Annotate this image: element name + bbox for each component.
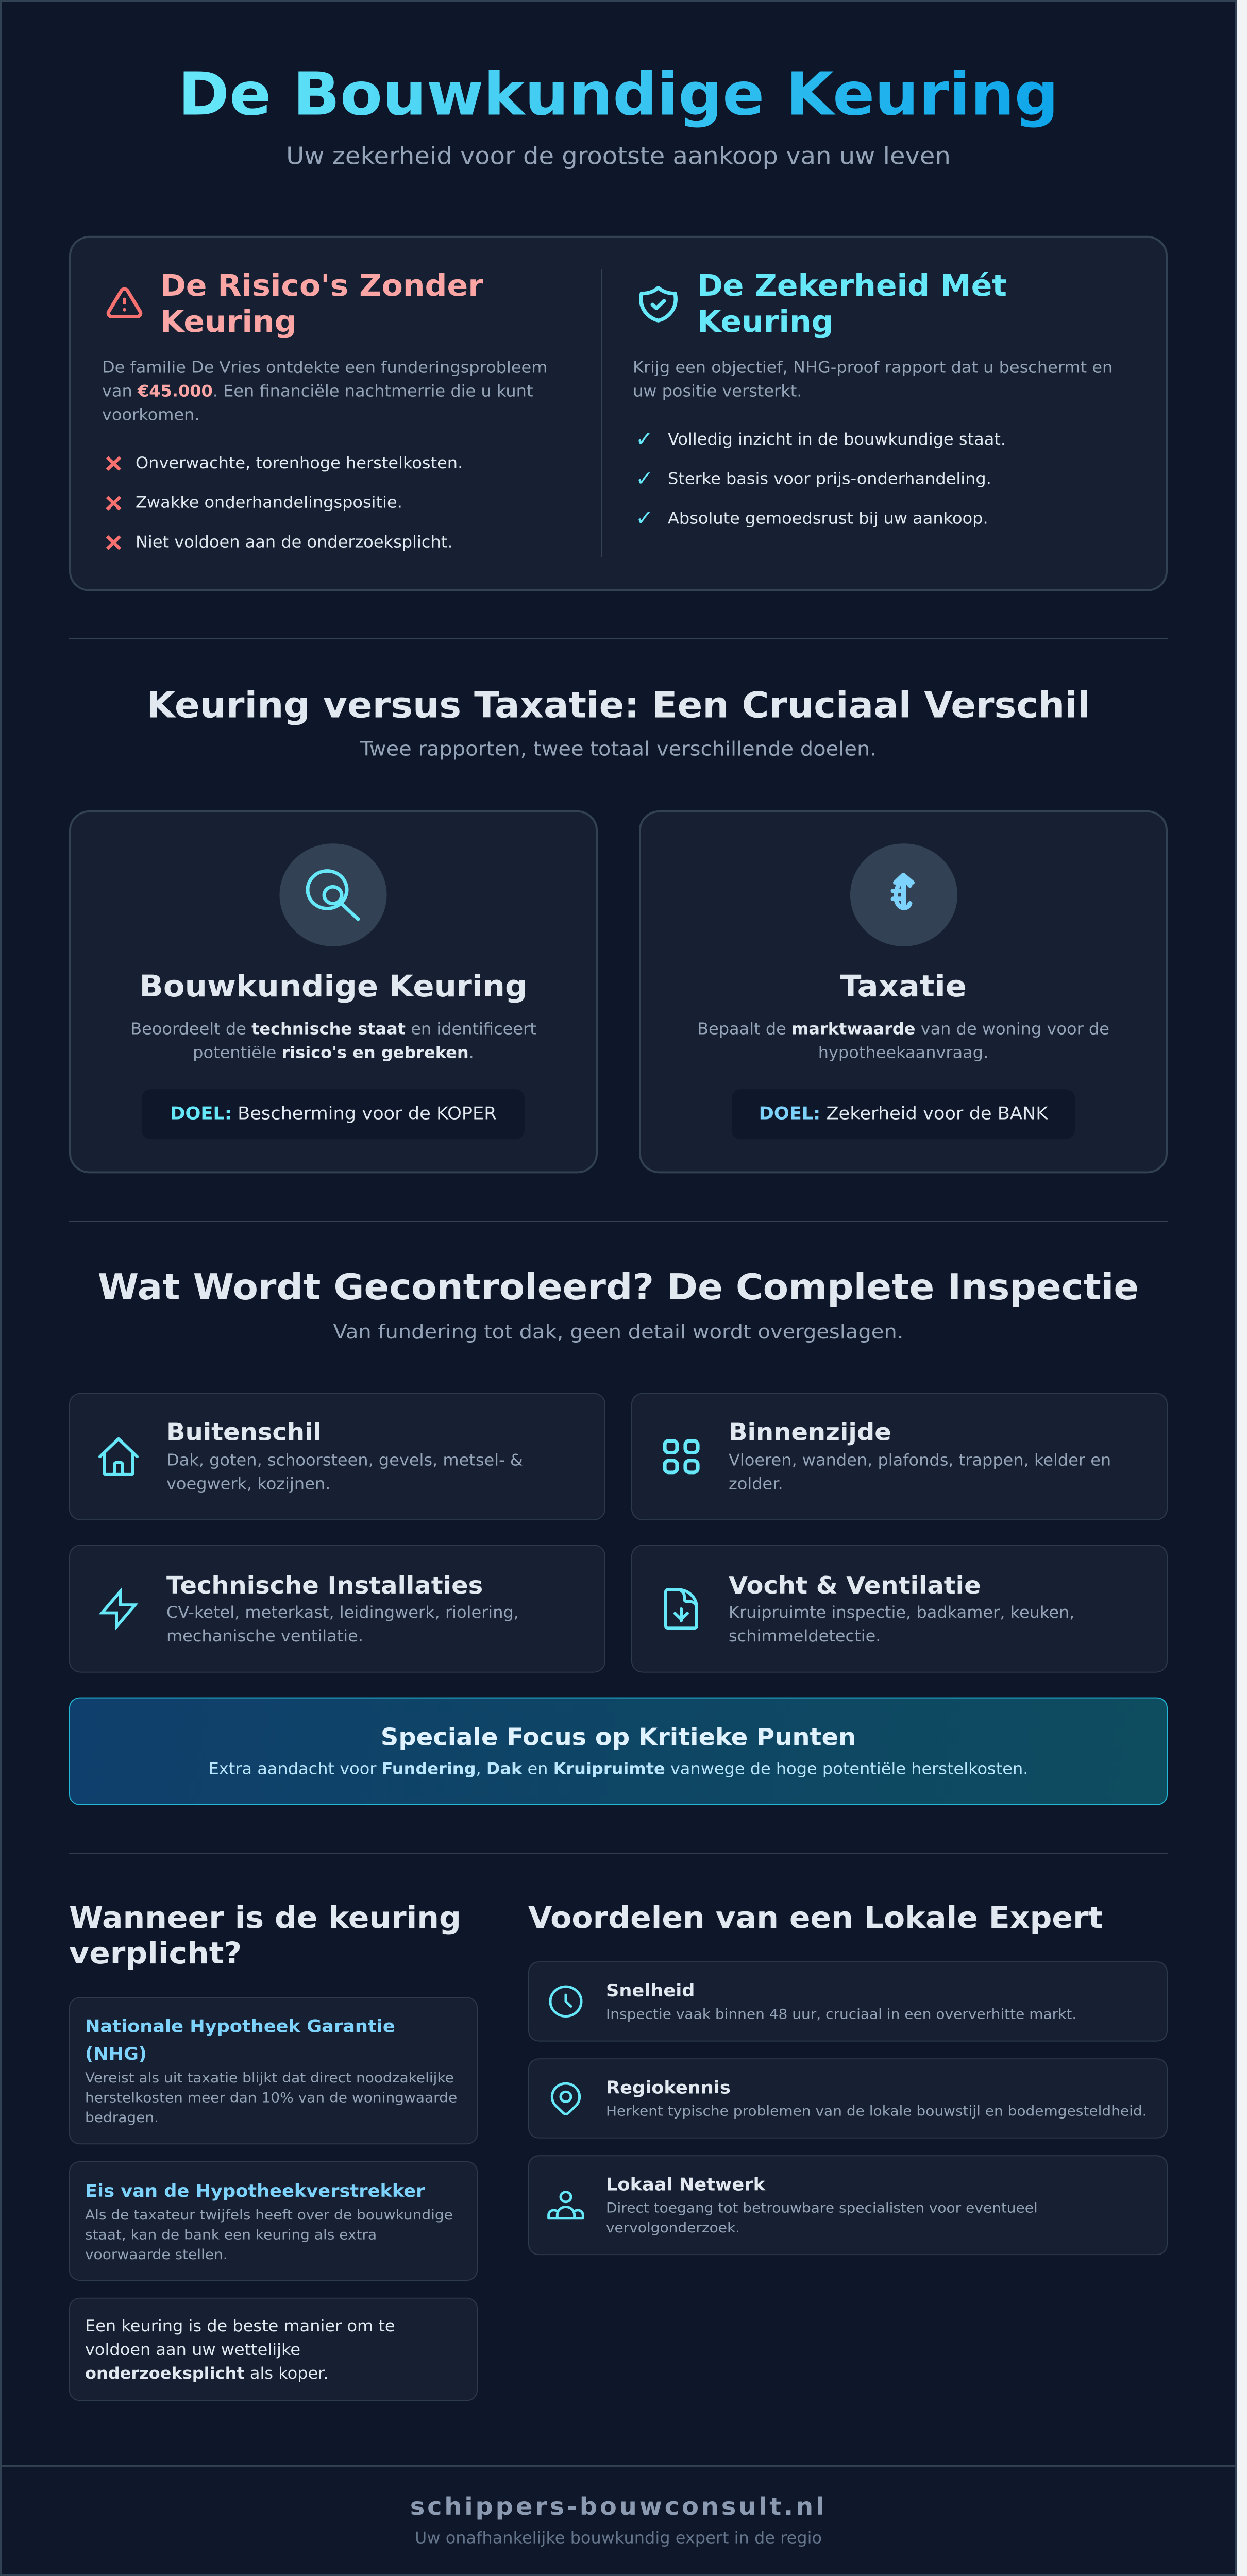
card text: Vloeren, wanden, plafonds, trappen, kelder en bbox=[729, 1451, 1111, 1469]
column: lokale expert bbox=[528, 1900, 1167, 2255]
list: certainty bbox=[635, 427, 1006, 530]
card: NHG: (NHG) bbox=[85, 2044, 147, 2064]
heading: certainty: Keuring bbox=[697, 304, 834, 339]
text: risks intro: van €45.000. Een financiële nachtmerrie die u kunt bbox=[102, 382, 533, 401]
card: onderzoeksplicht: onderzoeksplicht als koper. bbox=[85, 2365, 329, 2383]
card: hypotheekverstrekker bbox=[70, 2162, 477, 2280]
icon: lightning bbox=[102, 1591, 135, 1626]
icon: house bbox=[100, 1439, 137, 1475]
panel: bouwkundige keuring bbox=[70, 811, 597, 1172]
list: risks: Onverwachte, torenhoge herstelkosten. bbox=[136, 454, 463, 472]
card text: Beoordeelt de technische staat en identificeert bbox=[130, 1020, 536, 1039]
heading: risks: Keuring bbox=[160, 304, 297, 339]
card text: Kruipruimte inspectie, badkamer, keuken, bbox=[729, 1604, 1074, 1622]
text: certainty intro: uw positie versterkt. bbox=[633, 382, 802, 401]
card title: Bouwkundige Keuring bbox=[140, 969, 527, 1004]
card: vocht en ventilatie bbox=[632, 1545, 1167, 1672]
icon: warning triangle bbox=[108, 289, 141, 317]
card text bbox=[729, 1572, 1074, 1646]
goal badge bbox=[142, 1089, 525, 1139]
icon: map pin bbox=[552, 2083, 580, 2114]
list: certainty: Absolute gemoedsrust bij uw aankoop. bbox=[668, 510, 988, 528]
card: regiokennis: Herkent typische problemen van de lokale bouwstijl en bodemgesteldheid. bbox=[606, 2104, 1147, 2119]
text: certainty intro: Krijg een objectief, NHG-proof rapport dat u beschermt en bbox=[633, 359, 1113, 377]
card text: Dak, goten, schoorsteen, gevels, metsel- & bbox=[166, 1451, 523, 1469]
icon: grid bbox=[665, 1441, 698, 1472]
card title: Taxatie bbox=[840, 969, 967, 1004]
column: wanneer verplicht bbox=[69, 1900, 477, 2400]
footer bbox=[2, 2465, 1235, 2574]
goal badge bbox=[732, 1089, 1075, 1139]
card: regiokennis bbox=[529, 2059, 1167, 2138]
card text: Buitenschil bbox=[166, 1418, 322, 1446]
icon: shield check bbox=[641, 288, 676, 320]
heading: wanneer verplicht: verplicht? bbox=[69, 1936, 242, 1971]
icon: euro arrow bbox=[850, 843, 957, 946]
card text: Bepaalt de marktwaarde van de woning voor de bbox=[697, 1020, 1109, 1039]
card text: voegwerk, kozijnen. bbox=[166, 1475, 330, 1493]
card text bbox=[166, 1572, 519, 1646]
card: binnenzijde bbox=[632, 1393, 1167, 1520]
list: certainty: Volledig inzicht in de bouwkundige staat. bbox=[668, 430, 1006, 449]
list: risks: Niet voldoen aan de onderzoeksplicht. bbox=[136, 533, 452, 551]
heading: lokale expert: Voordelen van een Lokale Expert bbox=[528, 1900, 1103, 1935]
panel: risks versus certainty bbox=[70, 237, 1167, 590]
callout text: Extra aandacht voor Fundering, Dak en Kruipruimte vanwege de hoge potentiële herstelkosten. bbox=[209, 1760, 1028, 1778]
callout: speciale focus bbox=[70, 1698, 1167, 1805]
card: lokaal netwerk: Lokaal Netwerk bbox=[606, 2175, 766, 2195]
icon: clock bbox=[550, 1987, 581, 2016]
subheading: keuring versus taxatie: Twee rapporten, twee totaal verschillende doelen. bbox=[360, 738, 877, 760]
card text: Vocht & Ventilatie bbox=[729, 1572, 981, 1600]
card text: CV-ketel, meterkast, leidingwerk, riolering, bbox=[166, 1604, 519, 1622]
list: risks bbox=[107, 454, 463, 551]
list: risks: Zwakke onderhandelingspositie. bbox=[136, 494, 402, 512]
card text: schimmeldetectie. bbox=[729, 1628, 881, 1646]
list: certainty: Sterke basis voor prijs-onderhandeling. bbox=[668, 470, 991, 488]
card: snelheid: Snelheid bbox=[606, 1981, 695, 2001]
card: snelheid bbox=[529, 1962, 1167, 2041]
card text bbox=[729, 1418, 1111, 1493]
card text: Technische Installaties bbox=[166, 1572, 483, 1600]
panel: taxatie bbox=[640, 811, 1167, 1172]
icon: people bbox=[549, 2192, 583, 2218]
title: De Bouwkundige Keuring bbox=[178, 60, 1058, 129]
card: hypotheekverstrekker: Als de taxateur twijfels heeft over de bouwkundige bbox=[85, 2208, 453, 2223]
heading: inspectie: Wat Wordt Gecontroleerd? De Complete Inspectie bbox=[98, 1266, 1139, 1308]
text: risks intro: voorkomen. bbox=[102, 406, 200, 425]
footer brand: schippers-bouwconsult.nl bbox=[410, 2493, 827, 2521]
card: lokaal netwerk: Direct toegang tot betrouwbare specialisten voor eventueel bbox=[606, 2200, 1038, 2216]
icon: magnifier bbox=[279, 843, 386, 946]
card: regiokennis: Regiokennis bbox=[606, 2078, 731, 2098]
card: lokaal netwerk bbox=[529, 2156, 1167, 2255]
card text bbox=[166, 1418, 523, 1493]
heading: wanneer verplicht: Wanneer is de keuring bbox=[69, 1900, 461, 1935]
column: certainty bbox=[633, 268, 1113, 530]
text: risks intro: De familie De Vries ontdekte een funderingsprobleem bbox=[102, 359, 547, 377]
card text: potentiële risico's en gebreken. bbox=[193, 1044, 474, 1062]
card: NHG bbox=[70, 1997, 477, 2144]
list: certainty: ✓ bbox=[635, 466, 653, 490]
card: onderzoeksplicht bbox=[70, 2298, 477, 2400]
goal badge: DOEL: Bescherming voor de KOPER bbox=[170, 1104, 497, 1124]
card: NHG: Vereist als uit taxatie blijkt dat direct noodzakelijke bbox=[85, 2071, 454, 2086]
card: NHG: Nationale Hypotheek Garantie bbox=[85, 2016, 395, 2037]
card text: mechanische ventilatie. bbox=[166, 1628, 363, 1646]
footer tagline: Uw onafhankelijke bouwkundig expert in de regio bbox=[415, 2529, 822, 2547]
list: certainty: ✓ bbox=[635, 427, 653, 451]
card: NHG: herstelkosten meer dan 10% van de woningwaarde bbox=[85, 2090, 457, 2106]
heading: certainty: De Zekerheid Mét bbox=[697, 268, 1007, 303]
card: snelheid: Inspectie vaak binnen 48 uur, cruciaal in een oververhitte markt. bbox=[606, 2007, 1076, 2022]
card text: zolder. bbox=[729, 1475, 783, 1493]
callout title: Speciale Focus op Kritieke Punten bbox=[381, 1724, 856, 1751]
list: certainty: ✓ bbox=[635, 506, 653, 530]
column: risks bbox=[102, 268, 547, 551]
card: hypotheekverstrekker: staat, kan de bank een keuring als extra bbox=[85, 2227, 377, 2243]
card text: hypotheekaanvraag. bbox=[818, 1044, 988, 1062]
card: onderzoeksplicht: Een keuring is de beste manier om te bbox=[85, 2317, 395, 2335]
subtitle: Uw zekerheid voor de grootste aankoop van uw leven bbox=[286, 143, 951, 170]
heading: risks: De Risico's Zonder bbox=[160, 268, 483, 303]
card: lokaal netwerk: vervolgonderzoek. bbox=[606, 2221, 740, 2236]
heading: keuring versus taxatie: Keuring versus Taxatie: Een Cruciaal Verschil bbox=[146, 685, 1090, 726]
card: onderzoeksplicht: voldoen aan uw wettelijke bbox=[85, 2341, 300, 2359]
goal badge: DOEL: Zekerheid voor de BANK bbox=[759, 1104, 1049, 1124]
subheading: inspectie: Van fundering tot dak, geen detail wordt overgeslagen. bbox=[333, 1321, 903, 1344]
card: hypotheekverstrekker: Eis van de Hypotheekverstrekker bbox=[85, 2181, 425, 2201]
card: buitenschil bbox=[70, 1393, 605, 1520]
card: technische installaties bbox=[70, 1545, 605, 1672]
card: hypotheekverstrekker: voorwaarde stellen. bbox=[85, 2247, 228, 2263]
icon: document download bbox=[666, 1589, 697, 1628]
card text: Binnenzijde bbox=[729, 1418, 891, 1446]
card: NHG: bedragen. bbox=[85, 2110, 159, 2126]
